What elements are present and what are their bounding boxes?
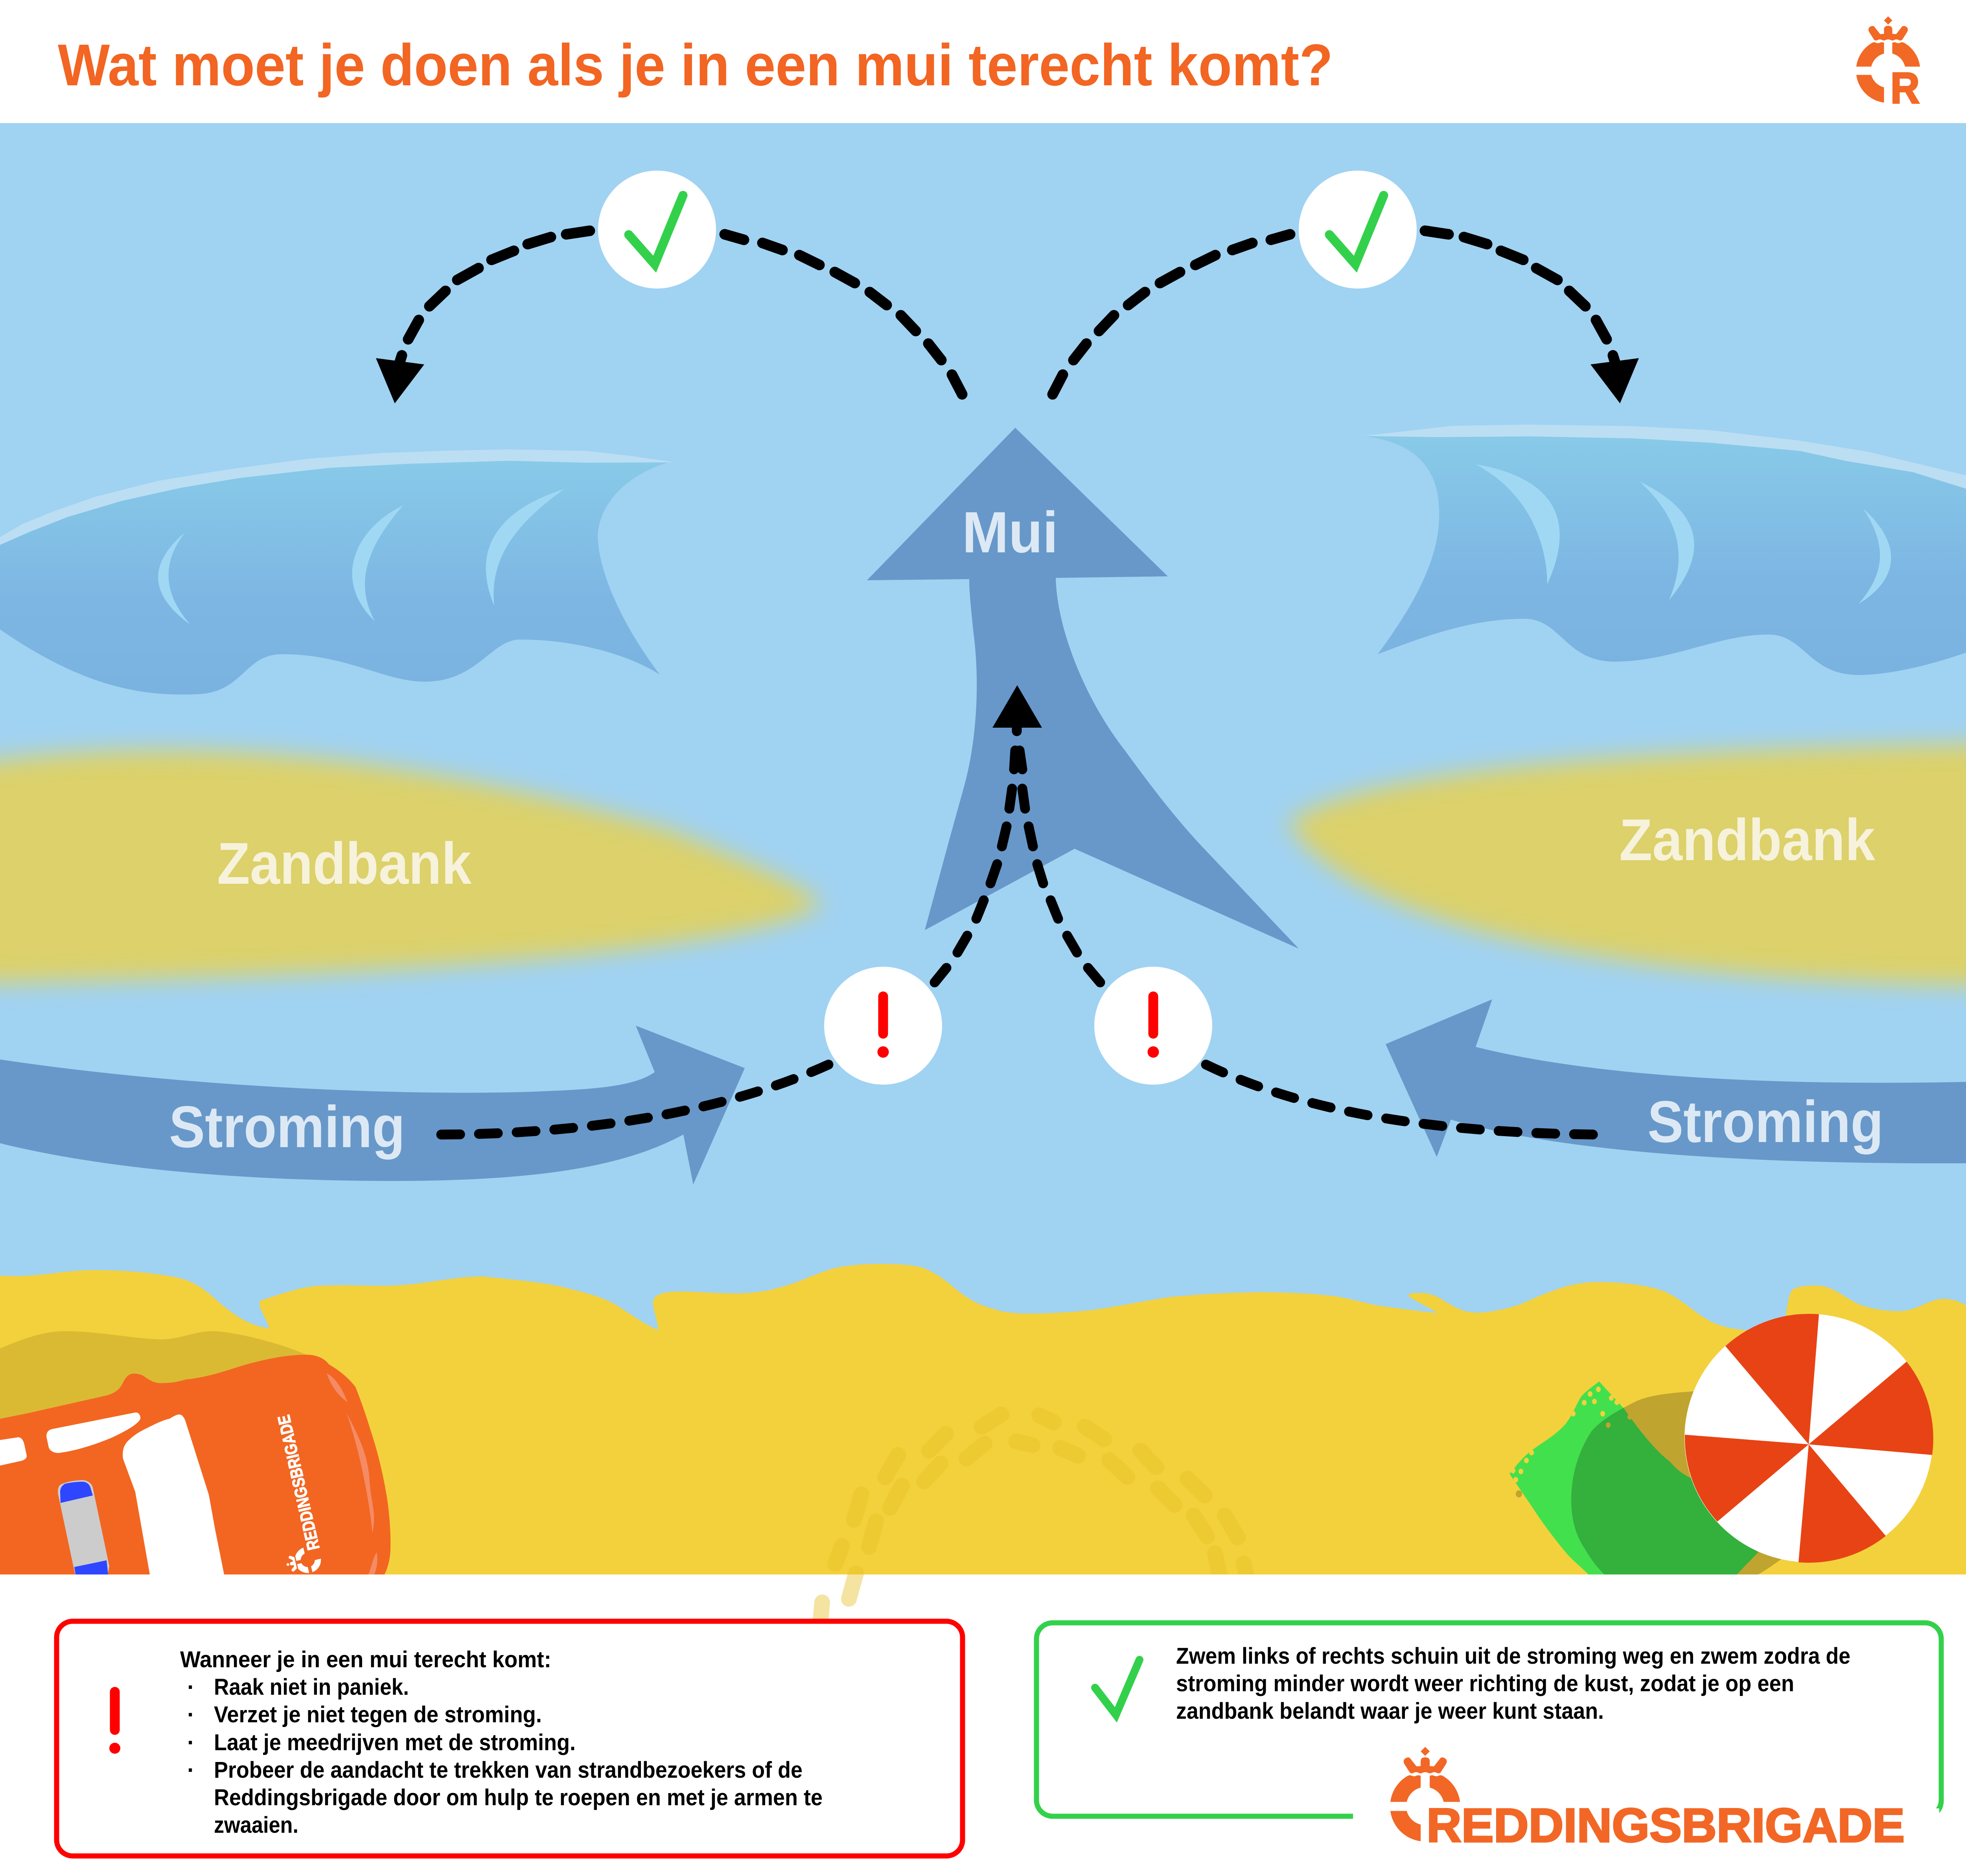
towel with shadow: [1509, 1381, 1848, 1574]
check marker right: [1299, 171, 1417, 289]
panel: how to escape (green): [1036, 1623, 1949, 1824]
arrow: dashed escape route to the left: [376, 231, 590, 403]
title: Wat moet je doen als je in een mui terecht komt?: [58, 32, 1333, 98]
panel: how to escape (green): stroming minder wordt weer richting de kust, zodat je op een: [1176, 1671, 1794, 1696]
left breaking wave: [0, 449, 675, 695]
panel: how to escape (green): Zwem links of rechts schuin uit de stroming weg en zwem zodra de: [1176, 1643, 1850, 1669]
panel: what to do when caught (red): zwaaien.: [214, 1812, 298, 1838]
arrow: rip current (mui): [867, 428, 1299, 949]
right breaking wave: [1363, 425, 1966, 675]
left sandbank: [0, 750, 822, 984]
logo: Reddingsbrigade wordmark: [1390, 1747, 1905, 1852]
footprints in the sand: [821, 1414, 1248, 1620]
panel: how to escape (green): zandbank belandt waar je weer kunt staan.: [1176, 1698, 1604, 1724]
panel: what to do when caught (red): Laat je meedrijven met de stroming.: [214, 1730, 576, 1755]
arrow: dashed left route into the rip: [441, 728, 1017, 1135]
beach ball: [1684, 1314, 1933, 1563]
rescue car with shadow: [0, 1331, 390, 1578]
footer background: [0, 1574, 1966, 1876]
arrowhead: dashed rip route: [992, 685, 1042, 728]
warning marker left: [824, 967, 942, 1085]
panel: what to do when caught (red): ·: [187, 1757, 195, 1783]
arrow: dashed path from rip to left check: [725, 234, 962, 394]
arrow: dashed right route into the rip: [1020, 750, 1595, 1135]
label: right Zandbank: Zandbank: [1619, 807, 1876, 873]
icon: header logo: [1856, 16, 1920, 112]
panel: what to do when caught (red): Reddingsbrigade door om hulp te roepen en met je armen te: [214, 1785, 823, 1810]
panel: what to do when caught (red): ·: [187, 1730, 195, 1755]
panel: what to do when caught (red): Wanneer je in een mui terecht komt:: [180, 1647, 551, 1672]
warning marker right: [1094, 967, 1212, 1085]
label: left Stroming: Stroming: [169, 1094, 405, 1160]
arrow: left current: [0, 1026, 745, 1184]
panel: what to do when caught (red): ·: [187, 1702, 195, 1727]
arrow: right current: [1386, 999, 1966, 1163]
label: Mui: Mui: [962, 500, 1058, 565]
header background: [0, 0, 1966, 123]
beach sand: [0, 1264, 1966, 1574]
check marker left: [598, 171, 716, 289]
panel: what to do when caught (red): Probeer de aandacht te trekken van strandbezoekers of de: [214, 1757, 803, 1783]
sea background: [0, 123, 1966, 1574]
panel: what to do when caught (red): Raak niet in paniek.: [214, 1674, 409, 1700]
label: left Zandbank: Zandbank: [217, 830, 472, 896]
panel: what to do when caught (red): [57, 1621, 963, 1856]
logo: Reddingsbrigade wordmark: REDDINGSBRIGADE: [1427, 1799, 1905, 1852]
panel: what to do when caught (red): ·: [187, 1674, 195, 1700]
rescue car with shadow: REDDINGSBRIGADE: [274, 1413, 324, 1552]
right sandbank: [1288, 743, 1966, 986]
arrow: dashed path from rip to right check: [1053, 234, 1290, 394]
label: right Stroming: Stroming: [1648, 1089, 1883, 1155]
arrow: dashed escape route to the right: [1425, 231, 1639, 403]
icon: header logo: R: [1891, 64, 1920, 112]
panel: what to do when caught (red): Verzet je niet tegen de stroming.: [214, 1702, 542, 1727]
